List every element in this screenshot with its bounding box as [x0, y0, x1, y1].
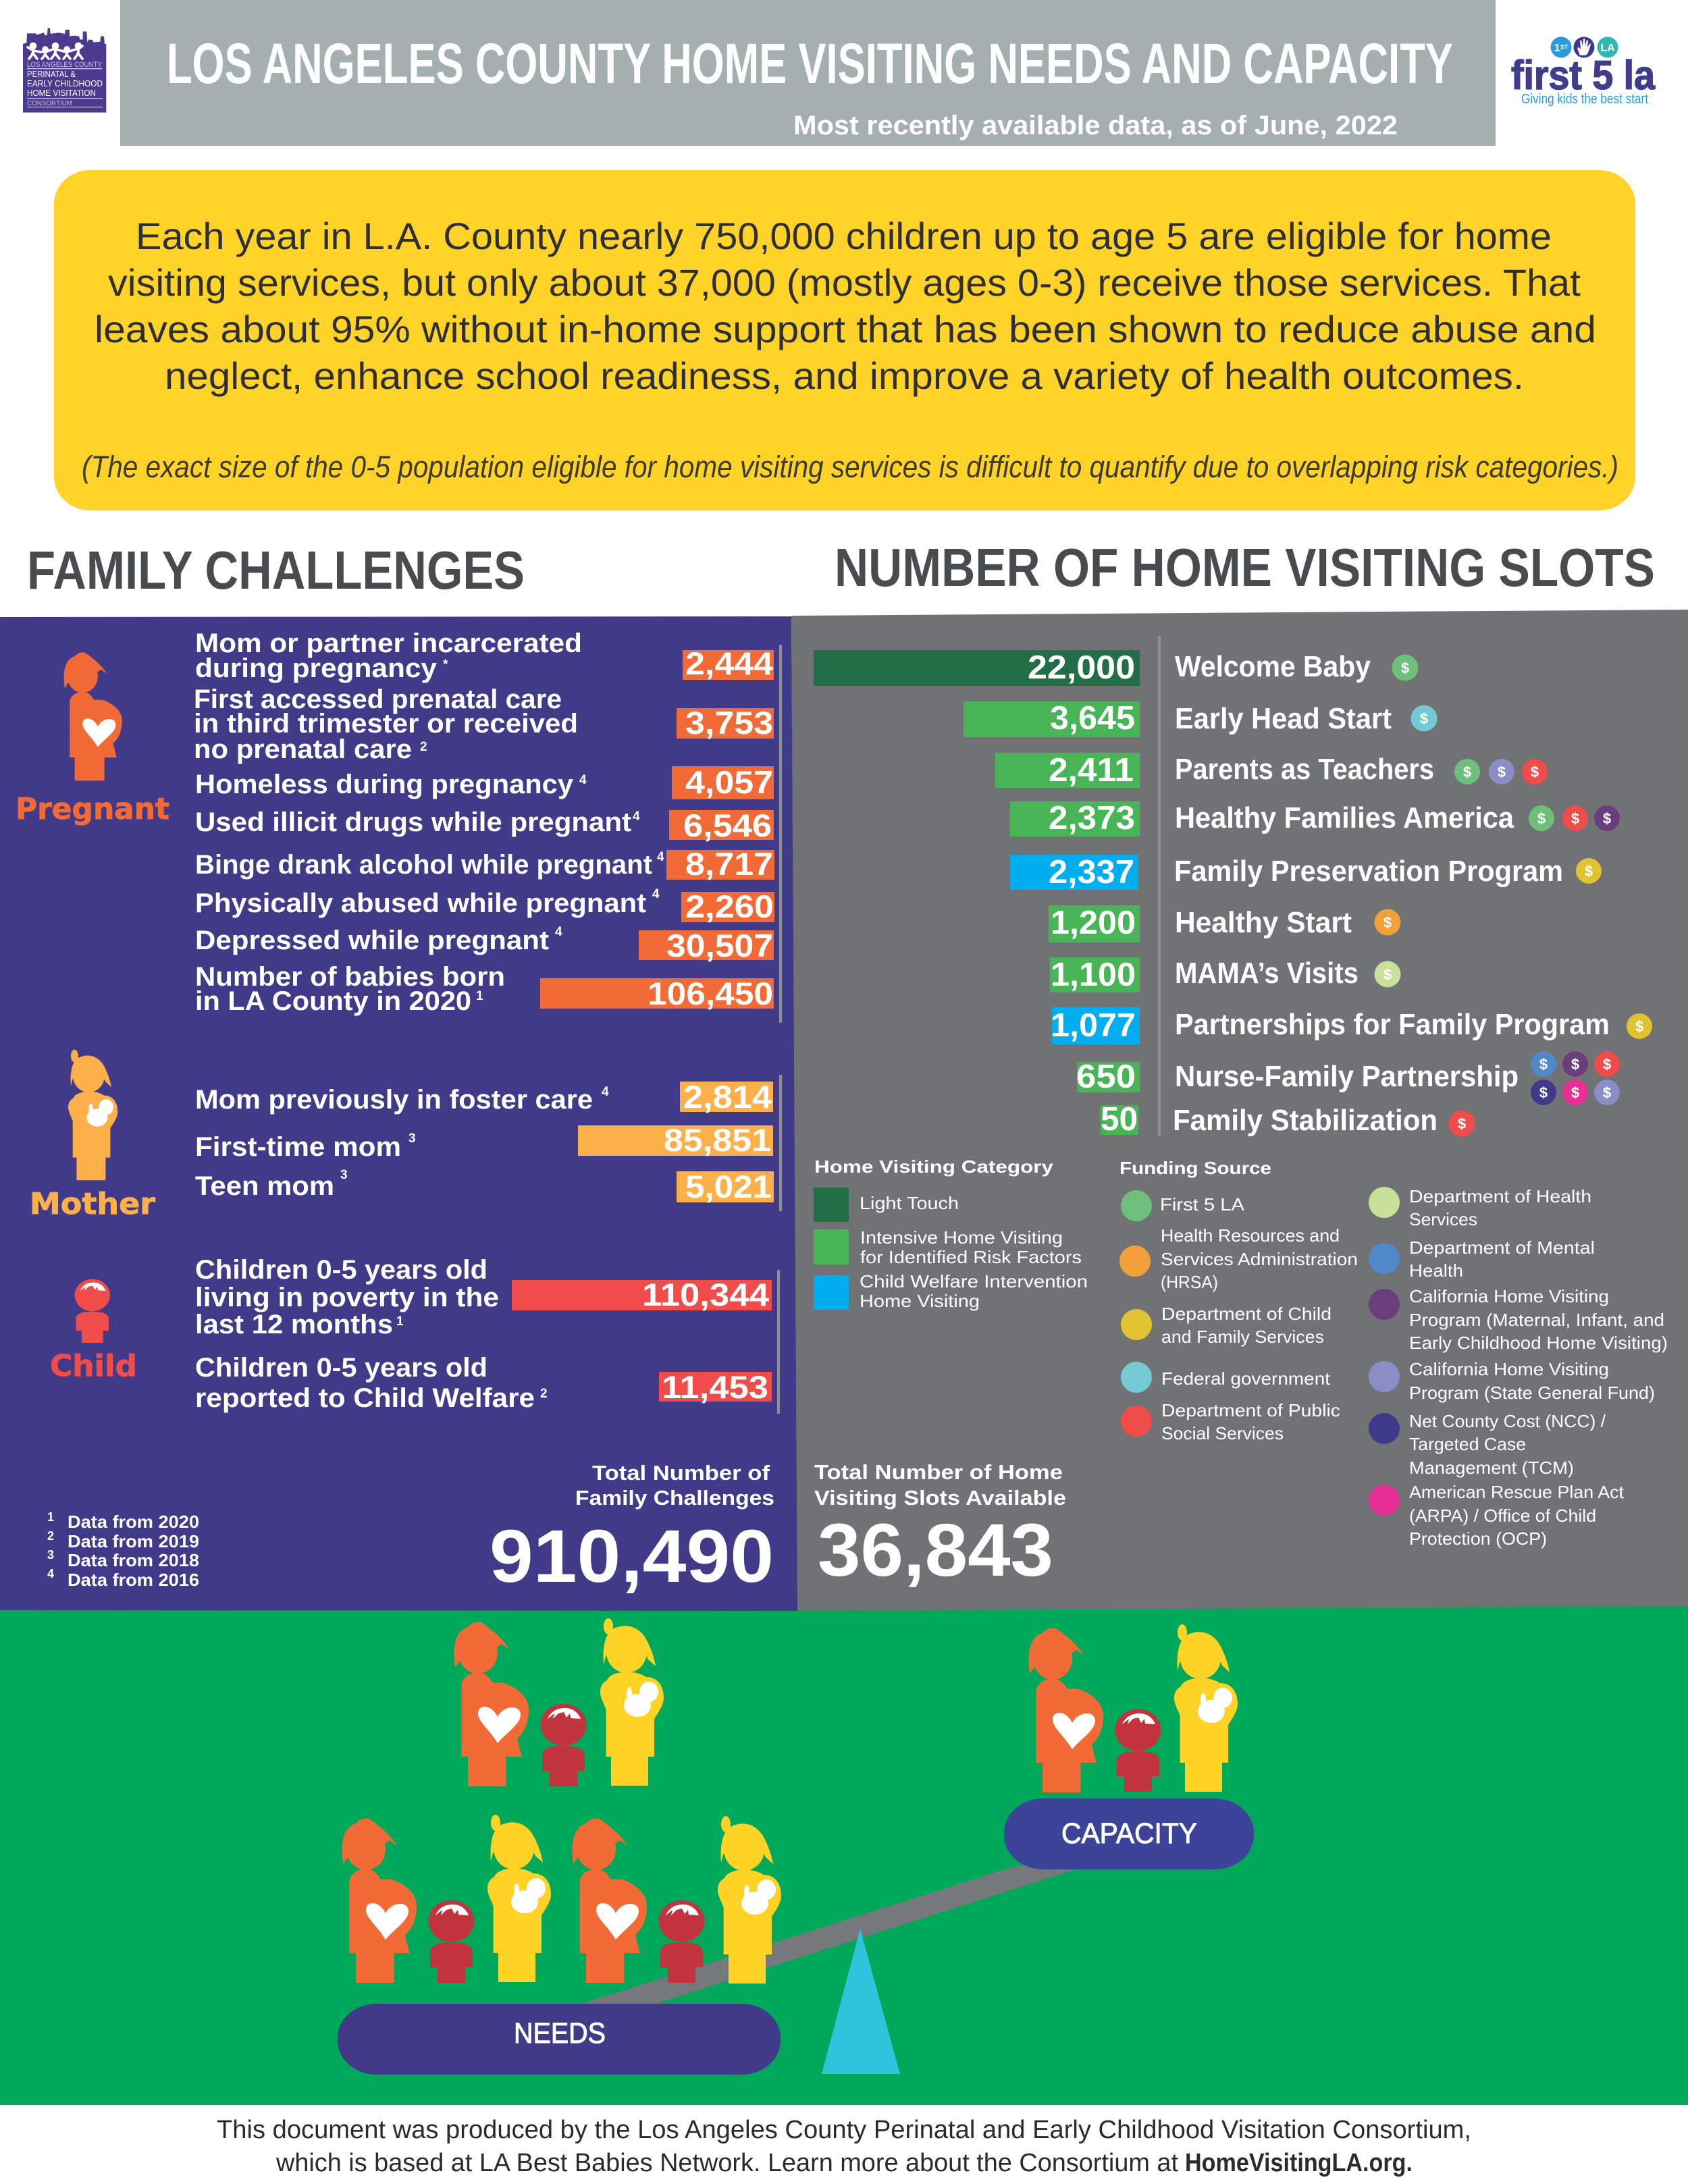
logo: First 5 LA: Giving kids the best start	[1521, 92, 1648, 107]
footnotes: 2	[47, 1529, 54, 1543]
legend: funding source: Department of Health	[1409, 1186, 1591, 1206]
family group right	[572, 1816, 781, 1983]
row: incarcerated: Mom or partner incarcerated	[195, 629, 582, 658]
row: Parents as Teachers: $	[1531, 764, 1539, 780]
row: Healthy Families America: 2,373	[1049, 800, 1135, 836]
logo: First 5 LA: ST	[1560, 44, 1568, 51]
row: Family Preservation Program: $	[1585, 863, 1593, 880]
needs families	[342, 1618, 781, 1983]
logo: First 5 LA: LA	[1600, 43, 1615, 54]
legend: home visiting category: Intensive Home Visiting	[860, 1227, 1063, 1248]
intro text: visiting services, but only about 37,000 (mostly ages 0-3) receive those services. That	[108, 261, 1581, 304]
row: Family Stabilization: 50	[1101, 1101, 1138, 1138]
legend: funding source: Health	[1409, 1260, 1463, 1281]
row: Partnerships for Family Program	[1051, 1007, 1652, 1044]
row: illicit drugs	[195, 807, 774, 843]
legend: funding source: Early Childhood Home Visiting)	[1409, 1333, 1668, 1353]
logo: LA County consortium: EARLY CHILDHOOD	[27, 78, 103, 88]
family group left	[342, 1815, 551, 1983]
row: Healthy Families America: $	[1603, 810, 1611, 827]
row: prenatal care: 2	[420, 740, 427, 754]
needs pill	[338, 2004, 781, 2075]
row: child welfare: reported to Child Welfare	[195, 1383, 535, 1413]
row: child welfare: 11,453	[662, 1369, 768, 1405]
row: homeless: Homeless during pregnancy	[195, 770, 574, 799]
needs pill: NEEDS	[514, 2017, 606, 2050]
legend: funding source: (ARPA) / Office of Child	[1409, 1506, 1596, 1526]
row: Nurse-Family Partnership: $	[1603, 1056, 1611, 1073]
row: Parents as Teachers: $	[1498, 764, 1506, 780]
row: incarcerated: during pregnancy	[195, 654, 438, 683]
row: Healthy Families America	[1010, 800, 1620, 836]
label: Mother: Mother	[30, 1187, 155, 1221]
row: Family Preservation Program: Family Preservation Program	[1174, 855, 1563, 888]
divider line	[1158, 636, 1161, 1136]
row: incarcerated	[195, 629, 774, 683]
legend: funding source: Department of Child	[1161, 1304, 1331, 1324]
row: incarcerated: *	[443, 658, 448, 672]
row: incarcerated: 2,444	[685, 645, 773, 681]
footnotes: Data from 2016	[68, 1570, 199, 1590]
row: prenatal care: no prenatal care	[194, 735, 412, 764]
legend: funding source: American Rescue Plan Act	[1409, 1482, 1625, 1502]
panel: intro callout	[54, 170, 1635, 510]
row: illicit drugs: 6,546	[683, 807, 772, 843]
row: Partnerships for Family Program: $	[1635, 1018, 1643, 1035]
capacity pill: CAPACITY	[1061, 1817, 1197, 1850]
row: babies born: 106,450	[648, 976, 773, 1011]
row: children in poverty: last 12 months	[195, 1310, 393, 1339]
intro text: Each year in L.A. County nearly 750,000 children up to age 5 are eligible for home	[136, 215, 1552, 257]
intro text: leaves about 95% without in-home support that has been shown to reduce abuse and	[95, 308, 1596, 350]
row: Early Head Start: $	[1420, 710, 1428, 727]
row: Nurse-Family Partnership	[1076, 1051, 1620, 1105]
row: foster care: Mom previously in foster care	[195, 1085, 593, 1115]
total home visiting slots: Total Number of Home	[814, 1460, 1063, 1484]
row: physically abused: 4	[652, 887, 660, 901]
row: child welfare: 2	[540, 1387, 548, 1401]
logo: LA County consortium	[23, 28, 106, 113]
row: Early Head Start: 3,645	[1050, 700, 1135, 737]
footnotes: 3	[47, 1548, 54, 1562]
intro text: neglect, enhance school readiness, and improve a variety of health outcomes.	[165, 354, 1524, 397]
row: teen mom: Teen mom	[195, 1171, 334, 1201]
logo: First 5 LA: 1	[1554, 43, 1560, 54]
row: Parents as Teachers	[995, 752, 1548, 789]
row: Family Stabilization	[1101, 1101, 1475, 1138]
legend: funding source: Department of Mental	[1409, 1237, 1595, 1258]
row: binge drinking: Binge drank alcohol while pregnant	[195, 850, 652, 880]
legend: funding source: Services	[1409, 1209, 1477, 1229]
row: Family Preservation Program	[1010, 854, 1602, 890]
row: binge drinking	[195, 846, 774, 882]
total home visiting slots: Visiting Slots Available	[814, 1486, 1066, 1510]
row: children in poverty: 1	[396, 1314, 404, 1329]
row: depressed	[195, 925, 774, 963]
logo: LA County consortium: CONSORTIUM	[27, 100, 72, 107]
row: Healthy Start	[1049, 905, 1400, 942]
legend: funding source: Funding Source	[1119, 1158, 1271, 1178]
row: Healthy Start: $	[1383, 914, 1392, 931]
legend: funding source: Net County Cost (NCC) /	[1409, 1411, 1606, 1431]
row: MAMA's Visits	[1050, 957, 1400, 993]
row: Nurse-Family Partnership: $	[1539, 1056, 1548, 1073]
panel: family challenges	[0, 616, 797, 1611]
row: physically abused: 2,260	[685, 888, 774, 924]
seesaw beam	[581, 1865, 1076, 2004]
footer text: which is based at LA Best Babies Network. Learn more about the Consortium at	[275, 2149, 1178, 2177]
panel: home visiting slots	[814, 636, 1668, 1592]
row: physically abused	[195, 887, 774, 924]
row: Welcome Baby: 22,000	[1028, 649, 1135, 686]
row: prenatal care: 3,753	[685, 705, 773, 741]
row: Parents as Teachers: $	[1463, 764, 1471, 780]
row: binge drinking: 8,717	[685, 846, 773, 882]
row: depressed: Depressed while pregnant	[195, 926, 549, 955]
row: Partnerships for Family Program: Partnerships for Family Program	[1175, 1008, 1610, 1041]
legend: home visiting category: Child Welfare Intervention	[860, 1271, 1088, 1291]
legend: home visiting category	[814, 1156, 1088, 1311]
row: first-time mom: 3	[408, 1131, 416, 1146]
row: Family Stabilization: $	[1458, 1115, 1466, 1132]
footnotes	[47, 1510, 199, 1590]
legend: funding source: Health Resources and	[1161, 1225, 1340, 1246]
row: prenatal care: in third trimester or received	[194, 709, 578, 739]
row: children in poverty	[195, 1255, 772, 1339]
footnotes: Data from 2019	[68, 1531, 199, 1551]
heading: family challenges: FAMILY CHALLENGES	[27, 540, 525, 600]
row: first-time mom	[195, 1122, 773, 1162]
legend: funding source: Protection (OCP)	[1409, 1528, 1547, 1549]
row: Family Stabilization: Family Stabilization	[1173, 1104, 1438, 1137]
row: Welcome Baby: $	[1401, 660, 1409, 676]
seesaw illustration	[338, 1618, 1254, 2075]
legend: funding source: Management (TCM)	[1409, 1458, 1574, 1478]
total family challenges	[490, 1461, 774, 1598]
row: Welcome Baby	[814, 649, 1418, 686]
row: Parents as Teachers: 2,411	[1049, 752, 1134, 789]
row: Nurse-Family Partnership: 650	[1076, 1059, 1136, 1095]
row: homeless	[195, 764, 774, 800]
legend: home visiting category: for Identified Risk Factors	[860, 1247, 1082, 1267]
row: children in poverty: living in poverty in the	[195, 1283, 499, 1312]
row: depressed: 30,507	[666, 928, 773, 963]
row: children in poverty: 110,344	[642, 1277, 769, 1312]
row: MAMA's Visits: $	[1383, 966, 1392, 983]
row: Healthy Families America: $	[1571, 810, 1579, 827]
row: first-time mom: First-time mom	[195, 1132, 401, 1162]
total home visiting slots: 36,843	[818, 1509, 1053, 1592]
total home visiting slots	[814, 1460, 1066, 1592]
row: Partnerships for Family Program: 1,077	[1051, 1007, 1136, 1044]
subtitle: Most recently available data, as of June, 2022	[793, 111, 1398, 140]
row: MAMA's Visits: 1,100	[1051, 957, 1136, 993]
logo: LA County consortium: LOS ANGELES COUNTY	[27, 61, 103, 69]
legend: funding source: Program (Maternal, Infant, and	[1409, 1310, 1664, 1330]
row: binge drinking: 4	[657, 850, 664, 864]
label: Child: Child	[50, 1349, 137, 1383]
legend: funding source: (HRSA)	[1161, 1272, 1218, 1292]
legend: home visiting category: Home Visiting Category	[814, 1156, 1054, 1177]
label: Pregnant: Pregnant	[16, 792, 169, 826]
divider lines	[777, 645, 782, 1414]
icon: child figure	[75, 1279, 110, 1343]
seesaw fulcrum	[822, 1929, 900, 2074]
row: Healthy Families America: Healthy Families America	[1175, 801, 1514, 834]
legend: funding source: Federal government	[1161, 1368, 1331, 1389]
legend: funding source: Department of Public	[1161, 1400, 1340, 1420]
row: child welfare	[195, 1353, 772, 1413]
row: babies born: Number of babies born	[195, 962, 505, 992]
row: homeless: 4	[579, 773, 587, 787]
legend: funding source: California Home Visiting	[1409, 1359, 1609, 1379]
legend: home visiting category: Home Visiting	[860, 1291, 980, 1311]
capacity pill	[1004, 1799, 1254, 1869]
header banner	[120, 0, 1496, 146]
footnotes: 4	[47, 1567, 54, 1580]
capacity family	[1028, 1624, 1238, 1792]
row: prenatal care: First accessed prenatal care	[194, 685, 562, 714]
footer text: This document was produced by the Los Angeles County Perinatal and Early Childhood Visitation Consortium,	[217, 2116, 1471, 2144]
icon: mother figure	[68, 1050, 117, 1180]
row: Early Head Start: Early Head Start	[1175, 702, 1392, 735]
row: babies born	[195, 962, 774, 1016]
row: Early Head Start	[964, 700, 1437, 737]
logo: First 5 LA: first 5 la	[1511, 53, 1656, 98]
total family challenges: Family Challenges	[575, 1486, 774, 1510]
row: Nurse-Family Partnership: $	[1571, 1084, 1579, 1101]
row: Parents as Teachers: Parents as Teachers	[1175, 753, 1434, 786]
row: babies born: in LA County in 2020	[195, 986, 471, 1016]
row: teen mom	[195, 1168, 774, 1204]
row: foster care: 2,814	[683, 1079, 772, 1115]
footnotes: Data from 2020	[68, 1512, 199, 1532]
legend: funding source	[1119, 1158, 1668, 1549]
intro text	[95, 215, 1596, 397]
icon: pregnant figure	[64, 652, 122, 780]
row: depressed: 4	[555, 925, 562, 939]
row: Nurse-Family Partnership: $	[1571, 1056, 1579, 1073]
legend: funding source: Services Administration	[1161, 1249, 1358, 1269]
row: foster care: 4	[602, 1085, 609, 1099]
row: children in poverty: Children 0-5 years old	[195, 1255, 487, 1285]
row: illicit drugs: Used illicit drugs while pregnant	[195, 807, 631, 837]
panel: green needs and capacity background	[0, 1605, 1688, 2105]
row: MAMA's Visits: MAMA’s Visits	[1175, 957, 1359, 990]
row: homeless: 4,057	[685, 764, 773, 800]
logo: LA County consortium: PERINATAL &	[27, 69, 76, 79]
total family challenges: Total Number of	[592, 1461, 770, 1485]
row: foster care	[195, 1079, 773, 1115]
row: Healthy Families America: $	[1537, 810, 1546, 827]
row: physically abused: Physically abused while pregnant	[195, 888, 646, 918]
legend: funding source: Social Services	[1161, 1423, 1284, 1443]
total family challenges: 910,490	[490, 1515, 774, 1598]
row: babies born: 1	[476, 989, 483, 1003]
row: teen mom: 5,021	[685, 1169, 772, 1204]
footnotes: Data from 2018	[68, 1550, 199, 1570]
row: first-time mom: 85,851	[664, 1122, 771, 1158]
family group top	[454, 1618, 664, 1786]
footer text: HomeVisitingLA.org.	[1185, 2149, 1413, 2177]
row: prenatal care	[194, 685, 774, 764]
row: Nurse-Family Partnership: $	[1539, 1084, 1548, 1101]
footnotes: 1	[47, 1510, 54, 1524]
legend: funding source: and Family Services	[1161, 1327, 1324, 1347]
row: Nurse-Family Partnership: $	[1603, 1084, 1611, 1101]
row: Family Preservation Program: 2,337	[1049, 854, 1134, 890]
row: Healthy Start: Healthy Start	[1175, 906, 1352, 939]
legend: home visiting category: Light Touch	[860, 1193, 959, 1213]
row: child welfare: Children 0-5 years old	[195, 1353, 487, 1383]
legend: funding source: First 5 LA	[1160, 1194, 1245, 1215]
legend: funding source: California Home Visiting	[1409, 1286, 1609, 1306]
row: Nurse-Family Partnership: Nurse-Family Partnership	[1175, 1060, 1519, 1093]
legend: funding source: Targeted Case	[1409, 1434, 1526, 1454]
row: Healthy Start: 1,200	[1051, 905, 1136, 941]
logo: LA County consortium: HOME VISITATION	[27, 88, 96, 98]
logo: First 5 LA	[1511, 36, 1656, 107]
row: illicit drugs: 4	[633, 809, 640, 824]
panel: slots background	[791, 610, 1688, 1611]
row: Welcome Baby: Welcome Baby	[1175, 650, 1371, 683]
footer text	[217, 2116, 1471, 2177]
legend: funding source: Program (State General Fund)	[1409, 1383, 1655, 1403]
row: teen mom: 3	[340, 1168, 348, 1182]
